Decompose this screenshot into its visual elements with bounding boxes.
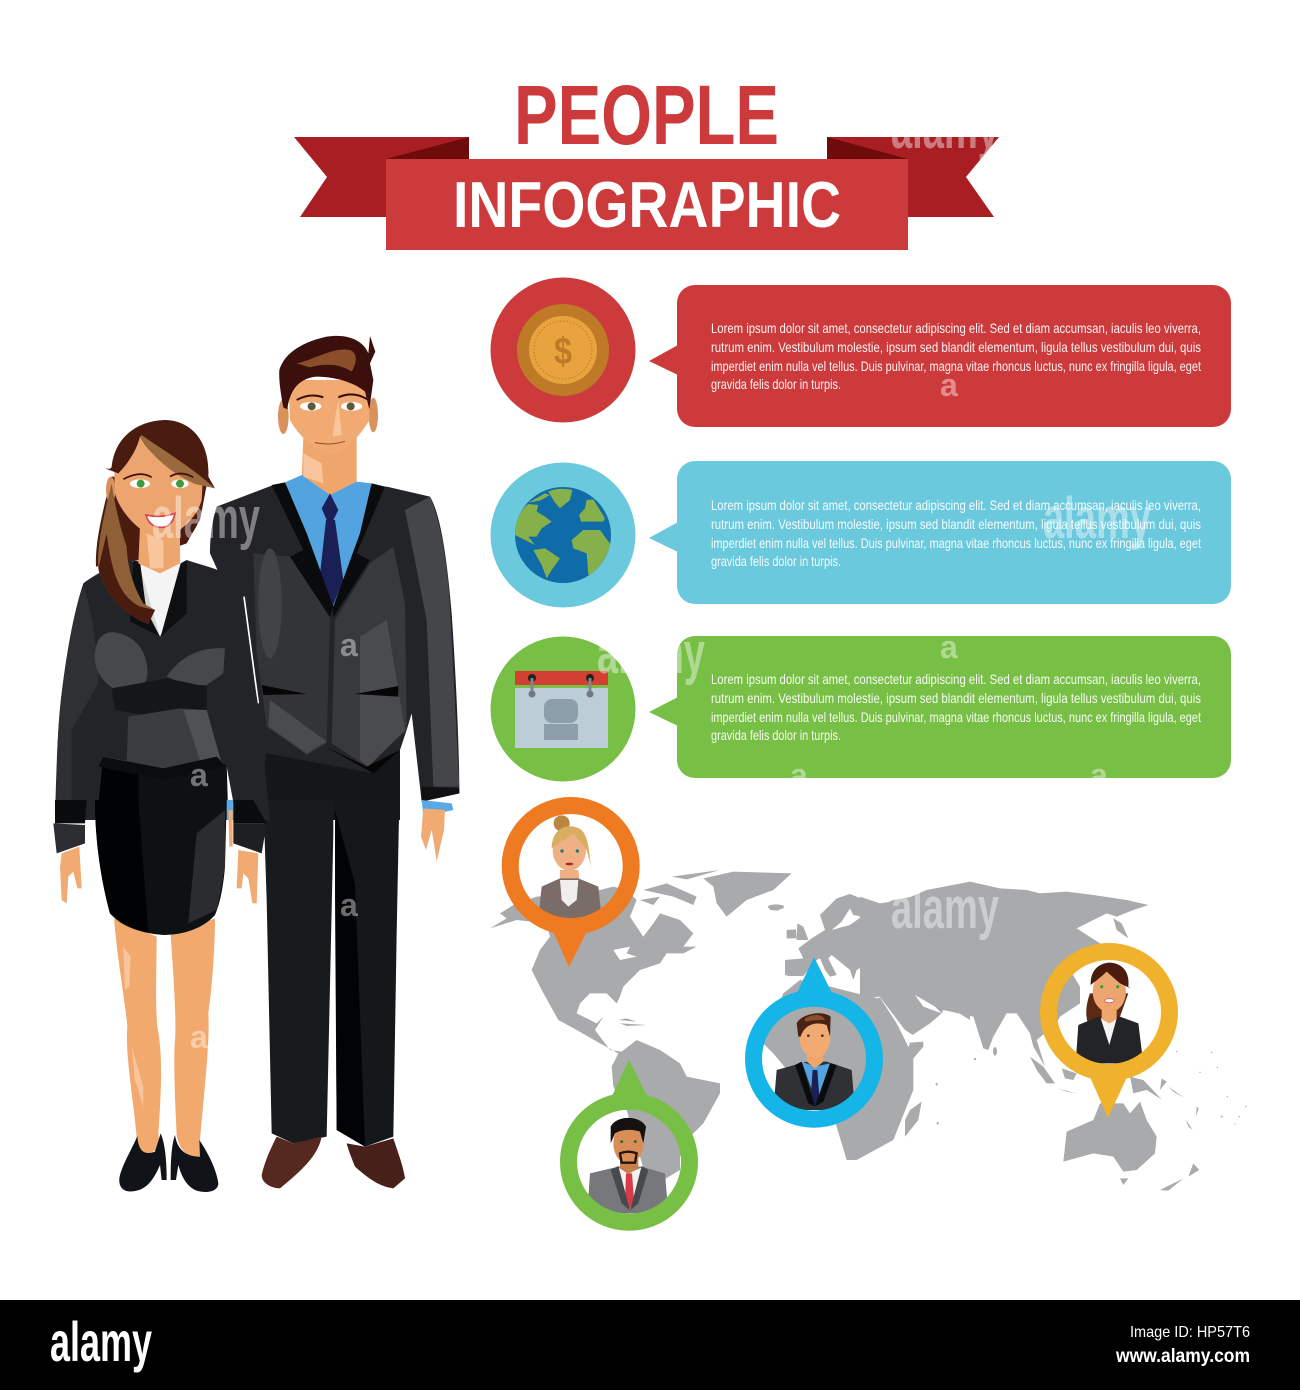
- man trouser legs: [263, 800, 333, 1143]
- footer url: www.alamy.com: [1115, 1346, 1250, 1367]
- text block: green box: rutrum enim. Vestibulum molestie, ipsum sed blandit elementum, ligula tellus vestibulum dui, quis: [711, 690, 1201, 706]
- speech box: green: [649, 636, 1231, 778]
- map: Australia: [1063, 1102, 1157, 1172]
- woman hands: [60, 847, 82, 903]
- woman neck and head: [138, 527, 180, 573]
- title banner: [294, 68, 999, 250]
- icon: calendar in green circle: [490, 636, 636, 782]
- ribbon tails: [294, 137, 999, 217]
- figure: businessman: [210, 336, 459, 1188]
- man hand: [421, 808, 445, 862]
- text block: blue box: rutrum enim. Vestibulum molestie, ipsum sed blandit elementum, ligula tellus vestibulum dui, quis: [711, 516, 1201, 532]
- avatar: bearded man: [587, 1118, 668, 1213]
- map: Asia: [860, 882, 1247, 1191]
- woman legs: [114, 918, 161, 1153]
- text block: green box: gravida felis dolor in turpis.: [711, 727, 841, 743]
- watermarks: a: [790, 757, 808, 793]
- map: Mediterranean and Baltic: [790, 908, 925, 992]
- heading: INFOGRAPHIC: INFOGRAPHIC: [453, 168, 841, 241]
- text block: red box: gravida felis dolor in turpis.: [711, 376, 841, 392]
- watermarks: alamy: [1043, 486, 1151, 551]
- watermarks: a: [190, 757, 208, 793]
- world map: [490, 870, 1247, 1191]
- watermarks: alamy: [597, 621, 705, 686]
- text block: blue box: gravida felis dolor in turpis.: [711, 553, 841, 569]
- text block: red box: [711, 320, 1201, 392]
- map pin: green with bearded man: [568, 1060, 690, 1222]
- footer bar: [0, 1300, 1300, 1390]
- woman hair back: [96, 477, 208, 567]
- watermarks: a: [940, 629, 958, 665]
- man trousers top: [253, 703, 400, 820]
- icon: coin in red circle: $: [554, 331, 572, 373]
- map pin: yellow with businesswoman: [1048, 952, 1170, 1118]
- woman skirt: [95, 800, 227, 935]
- icon: globe in blue circle: [490, 462, 636, 608]
- avatar: blonde woman: [538, 815, 602, 918]
- map: Madagascar: [905, 1102, 922, 1137]
- map: Europe and North Africa: [770, 887, 970, 1020]
- text block: blue box: Lorem ipsum dolor sit amet, consectetur adipiscing elit. Sed et diam accumsan, iaculis leo viverra,: [711, 497, 1201, 513]
- woman skirt top: [95, 763, 228, 820]
- sliver between figures: [244, 597, 258, 703]
- ribbon main band: [386, 159, 908, 250]
- man neck and shirt: [302, 437, 357, 497]
- man far cuff and hand: [227, 800, 233, 820]
- map visible through pin: [764, 1044, 785, 1068]
- watermarks: alamy: [152, 486, 260, 551]
- watermarks: a: [340, 627, 358, 663]
- watermarks: a: [340, 887, 358, 923]
- woman jacket: [55, 560, 270, 820]
- watermarks: a: [940, 367, 958, 403]
- footer logo: alamy: [50, 1310, 152, 1373]
- watermarks: alamy: [891, 876, 999, 941]
- text block: blue box: [711, 497, 1201, 569]
- woman shoes: [119, 1133, 167, 1192]
- figure: businesswoman: [53, 420, 270, 1192]
- map pin: orange with blonde woman: [510, 806, 631, 967]
- footer image id: Image ID: HP57T6: [1130, 1324, 1250, 1341]
- woman face details: [130, 479, 150, 488]
- woman sleeves: [55, 800, 87, 823]
- icon: coin in red circle: [490, 278, 636, 422]
- man head: [278, 399, 289, 434]
- avatar: businesswoman: [1076, 963, 1143, 1063]
- watermarks: a: [1090, 757, 1108, 793]
- map: Americas and Greenland: [490, 870, 792, 1180]
- text block: red box: rutrum enim. Vestibulum molestie, ipsum sed blandit elementum, ligula tellus vestibulum dui, quis: [711, 339, 1201, 355]
- text block: green box: Lorem ipsum dolor sit amet, consectetur adipiscing elit. Sed et diam accumsan, iaculis leo viverra,: [711, 671, 1201, 687]
- text block: green box: [711, 671, 1201, 743]
- man shoes: [262, 1137, 322, 1188]
- man jacket: [210, 485, 459, 820]
- map: Africa: [763, 980, 913, 1160]
- speech box: blue: [649, 461, 1231, 604]
- watermarks: alamy: [891, 96, 999, 161]
- watermarks: a: [190, 1019, 208, 1055]
- avatar: businessman: [773, 1013, 855, 1110]
- map pin: blue with businessman: [754, 957, 880, 1123]
- speech box: red: [649, 285, 1231, 427]
- watermarks: [152, 96, 1151, 1055]
- woman hair front: [105, 420, 215, 488]
- map: Red Sea and Gulf: [878, 995, 942, 1043]
- heading: PEOPLE: PEOPLE: [514, 68, 779, 162]
- text block: red box: Lorem ipsum dolor sit amet, consectetur adipiscing elit. Sed et diam accumsan, iaculis leo viverra,: [711, 320, 1201, 336]
